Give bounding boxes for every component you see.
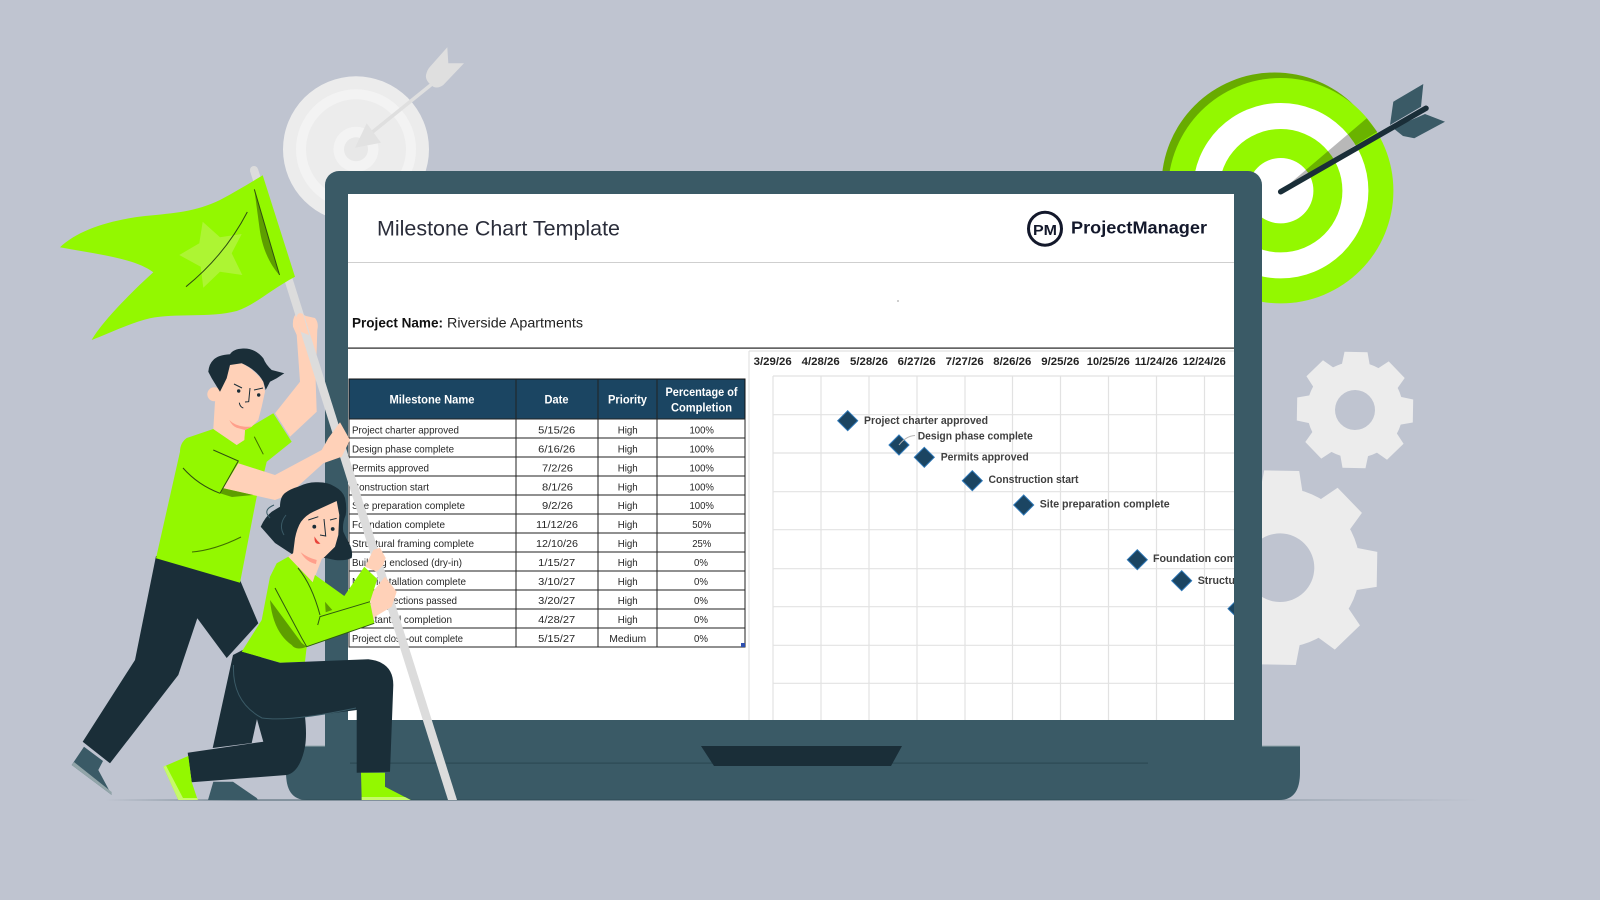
flag pole	[250, 166, 457, 800]
milestone labels: Project charter approved	[864, 415, 988, 427]
table rows	[352, 424, 714, 645]
logo: PM	[1033, 222, 1057, 239]
icon: large gear	[1181, 469, 1379, 666]
table rows: 100%	[689, 462, 714, 474]
table rows: 100%	[689, 424, 714, 436]
project name	[348, 300, 1234, 349]
table rows: 1/15/27	[538, 557, 575, 569]
man sleeve	[183, 450, 238, 493]
table rows: 0%	[694, 614, 708, 626]
logo: ProjectManager	[1071, 218, 1207, 238]
table rows: MEP installation complete	[352, 576, 466, 588]
table header: Completion	[671, 402, 732, 414]
table rows: 5/15/27	[538, 633, 575, 645]
project name: Project Name:	[352, 314, 443, 330]
icon: green target with dart	[1162, 72, 1445, 303]
table rows: 100%	[689, 481, 714, 493]
table rows: 12/10/26	[536, 538, 578, 550]
icon: pale target with arrow	[283, 47, 464, 222]
table rows: Design phase complete	[352, 443, 454, 455]
woman hands	[365, 548, 397, 625]
woman left shoe	[163, 756, 198, 800]
flag star	[179, 222, 242, 288]
woman right shoe	[361, 773, 411, 800]
flag	[60, 175, 295, 340]
woman neck	[288, 548, 323, 582]
milestone labels: Foundation complete	[1153, 553, 1261, 565]
table rows: 3/10/27	[538, 576, 575, 588]
table rows: 11/12/26	[536, 519, 578, 531]
table rows: Project charter approved	[352, 424, 459, 436]
table grid	[349, 379, 745, 647]
table rows: Substantial completion	[352, 614, 452, 626]
date axis: 3/29/26	[754, 356, 792, 368]
table header: Priority	[608, 394, 648, 406]
table rows: High	[618, 595, 638, 607]
woman face	[293, 501, 339, 564]
milestone chart	[748, 350, 1234, 720]
milestone labels: Construction start	[988, 474, 1079, 486]
table rows: 5/15/26	[538, 424, 575, 436]
sweater shadow	[270, 600, 307, 648]
man raised hand fingers	[296, 313, 309, 335]
laptop	[286, 171, 1300, 800]
table rows: Medium	[609, 633, 646, 645]
table rows: 3/20/27	[538, 595, 575, 607]
table rows: 100%	[689, 443, 714, 455]
man with flag: body	[72, 312, 318, 800]
logo	[1028, 212, 1207, 245]
table header: Date	[544, 394, 568, 406]
icon: small gear	[1296, 351, 1414, 469]
ground line	[105, 800, 1480, 801]
man front leg	[83, 556, 258, 763]
project name: Riverside Apartments	[447, 314, 583, 330]
table rows: Construction start	[352, 481, 429, 493]
date axis	[754, 357, 1226, 365]
milestone table	[349, 379, 745, 647]
man rear leg	[213, 640, 262, 748]
table rows: Building enclosed (dry-in)	[352, 557, 462, 569]
table rows: High	[618, 500, 638, 512]
woman sweater	[242, 557, 377, 663]
woman pants	[188, 652, 393, 782]
table rows: High	[618, 462, 638, 474]
table rows: 100%	[689, 500, 714, 512]
table rows: High	[618, 614, 638, 626]
date axis: 7/27/26	[946, 356, 984, 368]
table rows: Permits approved	[352, 462, 429, 474]
table rows: 7/2/26	[542, 462, 573, 474]
table rows: High	[618, 557, 638, 569]
milestone markers	[838, 411, 1248, 619]
table rows: High	[618, 538, 638, 550]
man raised arm	[275, 312, 318, 437]
man shirt	[156, 413, 292, 583]
date axis: 11/24/26	[1135, 356, 1178, 368]
table rows: High	[618, 481, 638, 493]
man sleeve shadow	[220, 488, 253, 497]
milestone labels	[864, 416, 1234, 584]
table rows: 0%	[694, 633, 708, 645]
date axis: 4/28/26	[802, 356, 840, 368]
title: Milestone Chart Template	[377, 218, 620, 240]
table rows: Structural framing complete	[352, 538, 474, 550]
date axis: 9/25/26	[1041, 356, 1079, 368]
date axis: 8/26/26	[993, 356, 1031, 368]
table header	[349, 379, 745, 419]
table rows: Foundation complete	[352, 519, 445, 531]
table rows: Site preparation complete	[352, 500, 465, 512]
woman hair	[261, 482, 352, 560]
table rows: 9/2/26	[542, 500, 573, 512]
man head	[207, 348, 284, 445]
table rows: High	[618, 443, 638, 455]
woman	[163, 482, 411, 800]
table rows: 0%	[694, 576, 708, 588]
milestone labels: Site preparation complete	[1040, 499, 1170, 511]
milestone labels: Structural framing complete	[1198, 575, 1340, 587]
table rows: Project close-out complete	[352, 633, 463, 645]
date axis: 10/25/26	[1087, 356, 1130, 368]
milestone labels: Design phase complete	[918, 431, 1033, 443]
table rows: High	[618, 576, 638, 588]
table rows: High	[618, 519, 638, 531]
table rows: 4/28/27	[538, 614, 575, 626]
milestone labels: Permits approved	[941, 452, 1029, 464]
table rows: High	[618, 424, 638, 436]
man lower arm	[183, 422, 350, 500]
man rear shoe	[208, 782, 258, 800]
table rows: 25%	[692, 538, 711, 550]
date axis: 12/24/26	[1183, 356, 1226, 368]
leader line	[899, 436, 915, 445]
table rows: 0%	[694, 595, 708, 607]
date axis: 5/28/26	[850, 356, 888, 368]
man front shoe	[72, 747, 112, 795]
screen header	[348, 212, 1234, 263]
table header: Percentage of	[666, 387, 738, 399]
chart grid	[749, 351, 1234, 720]
date axis: 6/27/26	[898, 356, 936, 368]
table rows: Final inspections passed	[352, 595, 457, 607]
table rows: 6/16/26	[538, 443, 575, 455]
table rows: 8/1/26	[542, 481, 573, 493]
table header: Milestone Name	[390, 394, 474, 406]
table rows: 0%	[694, 557, 708, 569]
table rows: 50%	[692, 519, 711, 531]
infographic canvas	[60, 48, 1450, 800]
